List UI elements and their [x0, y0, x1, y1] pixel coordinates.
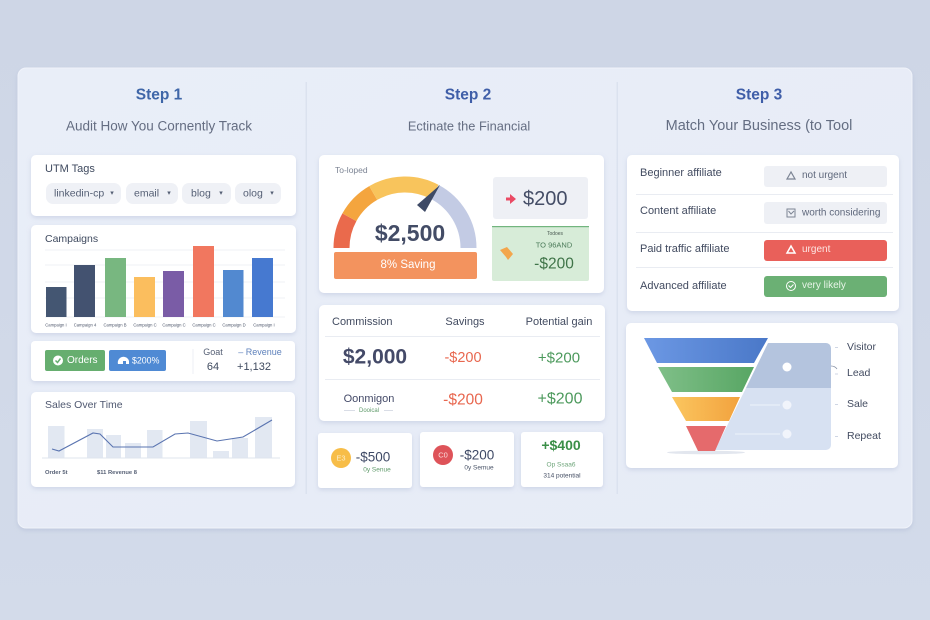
stat card: -$500: -$500	[356, 450, 390, 464]
panel: commission table: Savings	[445, 316, 485, 328]
panel: campaigns bar chart: Campaign C	[162, 322, 186, 328]
panel: affiliate types	[627, 155, 899, 311]
panel: affiliate types: Beginner affiliate	[640, 167, 722, 179]
badge: urgent: urgent	[802, 244, 831, 255]
panel: commission table: Oonmigon	[344, 393, 394, 405]
panel: savings gauge: 8% Saving	[381, 259, 435, 271]
panel: commission table: Commission	[332, 316, 393, 328]
panel: campaigns bar chart: Campaign C	[133, 322, 157, 328]
panel: sales over time chart	[31, 392, 295, 487]
gauge	[341, 184, 468, 248]
panel: UTM tags: olog	[243, 188, 263, 200]
funnel labels: Lead	[847, 367, 871, 379]
panel: commission table: Potential gain	[526, 316, 592, 328]
panel: campaigns bar chart: Campaign D	[222, 322, 246, 328]
panel: UTM tags: blog	[191, 188, 211, 200]
panel: orders and goal: $200%	[132, 356, 160, 366]
panel: savings gauge: To-loped	[335, 165, 368, 175]
stat card: -$200: -$200	[460, 448, 494, 462]
stat card: +$400: Op Ssaa6	[547, 462, 576, 468]
step 1 heading: Step 1	[136, 86, 183, 104]
step 2 heading: Step 2	[445, 86, 491, 104]
column: step 2	[318, 86, 605, 488]
step 3 heading: Step 3	[736, 86, 783, 104]
panel: campaigns bar chart	[31, 225, 296, 333]
stat card: -$500	[318, 433, 412, 488]
step 3 subtitle: Match Your Business (to Tool	[666, 118, 852, 134]
panel: UTM tags: ▾	[167, 190, 171, 197]
panel: commission table: $2,000	[343, 346, 407, 368]
panel: orders and goal: Orders	[67, 355, 98, 366]
panel: commission table: +$200	[538, 390, 583, 408]
panel: sales over time chart: Order 5t	[45, 470, 68, 476]
panel: orders and goal: +1,132	[237, 361, 271, 373]
panel: affiliate types: Content affiliate	[640, 205, 716, 217]
panel: UTM tags	[31, 155, 296, 216]
panel: UTM tags: ▾	[270, 190, 274, 197]
stat card: +$400: +$400	[541, 437, 581, 453]
panel: savings gauge	[319, 155, 604, 293]
panel: campaigns bar chart: Campaign 4	[74, 322, 97, 328]
badge: very likely: very likely	[802, 280, 846, 291]
column: step 1	[31, 86, 296, 487]
panel: savings gauge: TO 96AND	[536, 240, 573, 250]
stat card: -$200	[420, 432, 514, 487]
funnel labels: Repeat	[847, 430, 881, 442]
stat card: +$400	[521, 432, 603, 487]
funnel backing panel	[715, 343, 831, 450]
panel: campaigns bar chart: Campaigns	[45, 233, 98, 245]
funnel labels: Sale	[847, 398, 868, 410]
funnel labels: Visitor	[847, 341, 876, 353]
stat card: +$400: 314 potential	[543, 472, 581, 480]
panel: affiliate types: Paid traffic affiliate	[640, 243, 729, 255]
badge: very likely	[764, 276, 887, 297]
panel: UTM tags: email	[134, 188, 159, 200]
panel: savings gauge: Todoes	[547, 231, 564, 237]
badge: not urgent	[764, 166, 887, 187]
panel: commission table: -$200	[443, 392, 483, 408]
step 2 subtitle: Ectinate the Financial	[408, 118, 530, 134]
panel: commission table: +$200	[538, 350, 580, 366]
badge: not urgent: not urgent	[802, 170, 847, 181]
panel: campaigns bar chart: Campaign B	[103, 322, 127, 328]
panel: funnel	[626, 323, 898, 468]
funnel labels	[831, 341, 881, 442]
panel: orders and goal: Goat	[203, 347, 223, 357]
panel: commission table	[319, 305, 605, 421]
badge: worth considering	[764, 202, 887, 224]
panel: commission table: -$200	[444, 350, 482, 366]
panel: commission table: Dooical	[359, 408, 379, 414]
panel: UTM tags: UTM Tags	[45, 163, 95, 175]
panel: UTM tags: ▾	[110, 190, 114, 197]
panel: campaigns bar chart: Campaign C	[192, 322, 216, 328]
funnel	[644, 338, 768, 451]
panel: campaigns bar chart: Campaign I	[45, 322, 67, 328]
panel: sales over time chart: $11 Revenue 8	[97, 470, 138, 476]
stat card: -$500: E3	[336, 454, 346, 462]
step 1 subtitle: Audit How You Cornently Track	[66, 118, 252, 134]
panel: UTM tags: ▾	[219, 190, 223, 197]
panel: UTM tags: linkedin-cp	[54, 188, 104, 200]
panel: savings gauge: $200	[523, 188, 568, 210]
stat card: -$200: 0y Semue	[464, 464, 494, 472]
panel: orders and goal: 64	[207, 361, 219, 373]
stat card: -$200: C0	[438, 450, 448, 460]
badge: urgent	[764, 240, 887, 261]
panel: savings gauge: -$200	[534, 256, 574, 272]
stat card: -$500: 0y Senue	[363, 466, 391, 474]
badge: worth considering: worth considering	[801, 208, 880, 218]
panel: affiliate types: Advanced affiliate	[640, 280, 727, 292]
main panel	[18, 68, 912, 528]
panel: savings gauge: $2,500	[375, 220, 445, 246]
panel: campaigns bar chart: Campaign I	[253, 322, 275, 328]
panel: orders and goal: – Revenue	[238, 347, 282, 357]
panel: sales over time chart: Sales Over Time	[45, 399, 123, 411]
column: step 3	[626, 86, 899, 468]
panel: orders and goal	[31, 341, 295, 381]
